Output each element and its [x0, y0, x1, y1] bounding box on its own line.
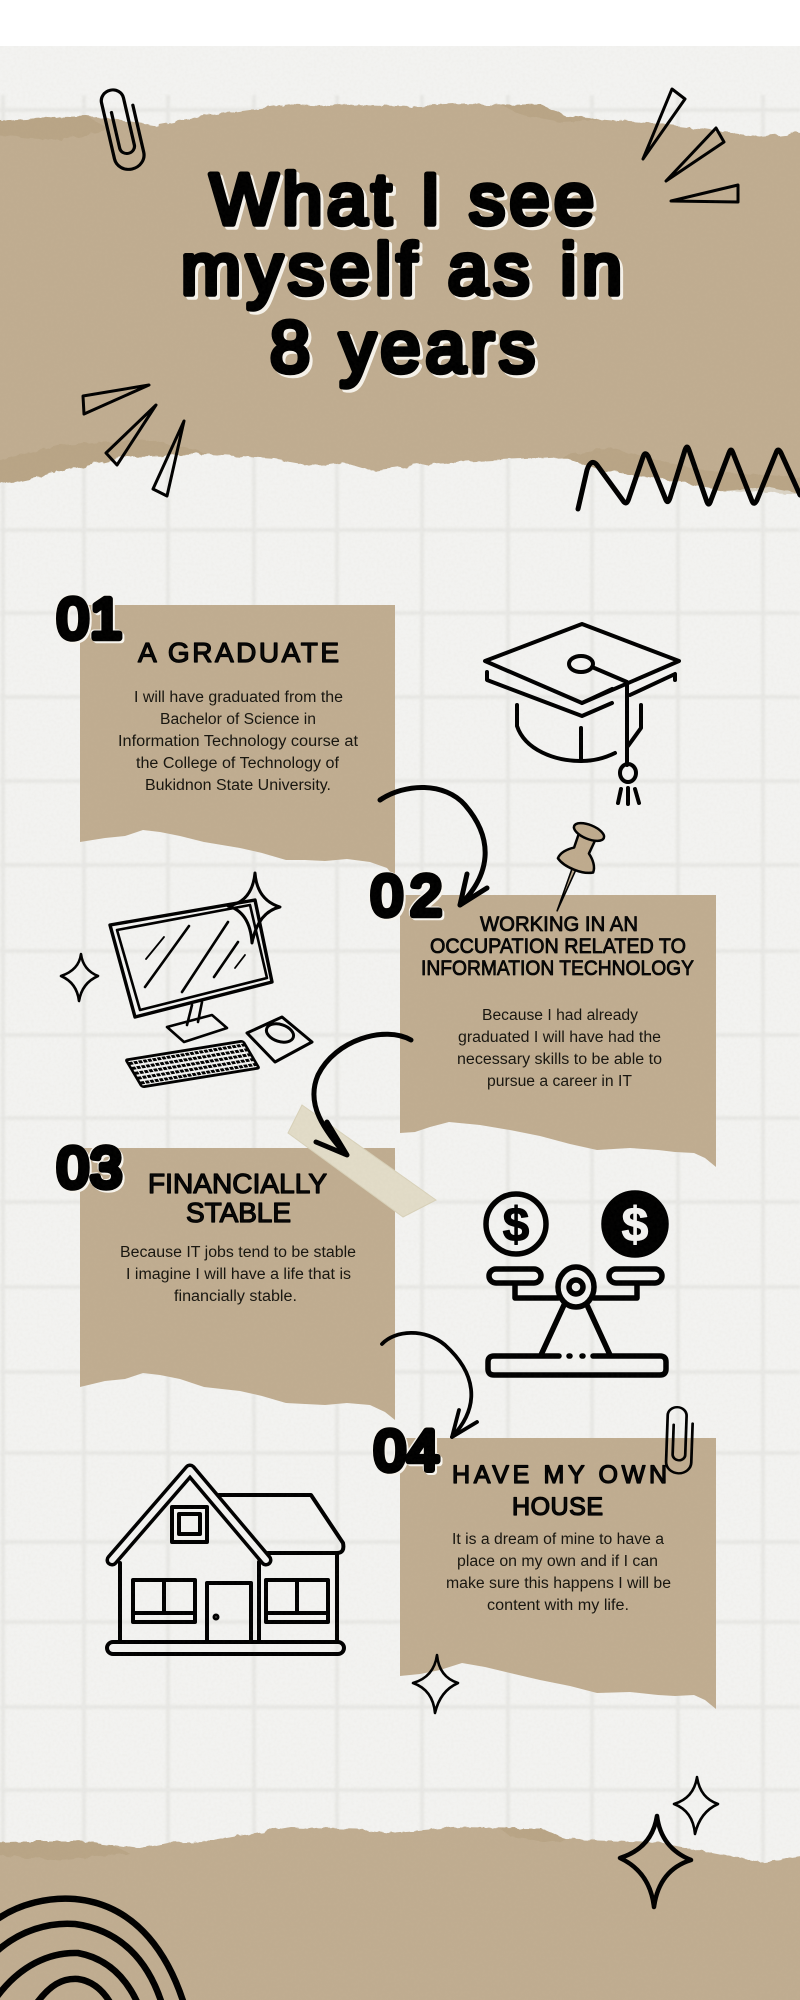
icon: house — [107, 1470, 344, 1654]
heading: financially stable: STABLE — [186, 1197, 291, 1228]
panel: step 4 — [374, 1419, 716, 1709]
icon: concentric arcs — [0, 1899, 184, 2000]
card 1 paper — [80, 605, 395, 878]
keyboard — [126, 1041, 259, 1087]
stand — [167, 1002, 227, 1042]
gable roof — [112, 1470, 266, 1560]
title: What I see — [210, 160, 594, 240]
icon: masking tape — [288, 1105, 436, 1217]
coin filled: $ — [622, 1199, 649, 1252]
heading: working in an occupation — [421, 913, 694, 980]
number 02: 02 — [371, 864, 442, 928]
body text — [446, 1531, 671, 1614]
icon: graduation cap — [485, 624, 679, 804]
body text: financially stable. — [174, 1288, 297, 1305]
side roof — [219, 1495, 343, 1553]
header torn paper band — [0, 104, 800, 495]
number 03: 03 — [57, 1136, 122, 1200]
title — [181, 160, 622, 388]
heading: have my own house: HAVE MY OWN — [452, 1461, 667, 1489]
panel: step 3 — [57, 1136, 395, 1420]
body text: Bachelor of Science in — [160, 711, 316, 728]
scale beam and pans — [489, 1267, 662, 1307]
icon: burst top right — [643, 89, 738, 202]
body text: It is a dream of mine to have a — [452, 1531, 664, 1548]
heading: working in an occupation: INFORMATION TECHNOLOGY — [421, 957, 694, 980]
heading: have my own house: HOUSE — [512, 1493, 603, 1521]
arrow: step 3 to step 4 — [382, 1333, 477, 1437]
body text: necessary skills to be able to — [457, 1051, 662, 1068]
body text: graduated I will have had the — [458, 1029, 661, 1046]
body text: Information Technology course at — [118, 733, 359, 750]
heading: working in an occupation: OCCUPATION RELATED TO — [430, 935, 686, 958]
base — [107, 1642, 344, 1654]
body text: Because I had already — [482, 1007, 638, 1024]
body text: pursue a career in IT — [487, 1073, 633, 1090]
icon: zigzag scribble — [578, 447, 800, 509]
body text: place on my own and if I can — [457, 1553, 658, 1570]
body text — [118, 689, 359, 794]
icon: sparkle on monitor — [228, 873, 280, 943]
attic window — [172, 1507, 207, 1542]
scale stand — [488, 1305, 666, 1375]
heading: financially stable: FINANCIALLY — [148, 1168, 327, 1199]
panel: step 2 — [371, 864, 716, 1167]
footer torn paper band — [0, 1827, 800, 2000]
body text — [457, 1007, 662, 1090]
arrow: step 1 to step 2 — [380, 787, 487, 905]
coin outline — [486, 1194, 546, 1254]
heading: working in an occupation: WORKING IN AN — [480, 913, 638, 936]
walls — [120, 1553, 337, 1642]
body text: Because IT jobs tend to be stable — [120, 1244, 356, 1261]
title: 8 years — [270, 308, 535, 388]
icon: balance scale with coins — [486, 1193, 666, 1375]
body text: the College of Technology of — [136, 755, 340, 772]
number 01: 01 — [57, 587, 122, 651]
heading: financially stable — [148, 1168, 327, 1228]
number 04: 04 — [374, 1419, 439, 1483]
panel: step 1 — [57, 587, 395, 878]
icon: burst lower left — [83, 385, 184, 496]
coin outline: $ — [503, 1199, 530, 1252]
heading: have my own house — [452, 1461, 667, 1521]
icon: sparkle under step 4 — [413, 1655, 458, 1713]
coin filled — [604, 1193, 666, 1255]
body text: content with my life. — [487, 1597, 629, 1614]
body text: Bukidnon State University. — [145, 777, 331, 794]
mouse and pad — [247, 1017, 312, 1062]
card 4 paper — [400, 1438, 716, 1709]
icon: sparkle right large — [620, 1816, 691, 1907]
icon: push pin — [540, 818, 609, 918]
card 2 paper — [400, 895, 716, 1167]
body text: I imagine I will have a life that is — [126, 1266, 351, 1283]
heading: a graduate: A GRADUATE — [138, 637, 339, 668]
card 3 paper — [80, 1148, 395, 1420]
body text: make sure this happens I will be — [446, 1575, 671, 1592]
icon: paperclip on step 4 — [666, 1407, 693, 1474]
body text: I will have graduated from the — [134, 689, 343, 706]
body text — [120, 1244, 356, 1305]
windows — [133, 1580, 328, 1622]
icon: sparkle right small — [674, 1777, 718, 1834]
icon: paperclip top left — [99, 86, 147, 172]
icon: desktop computer — [110, 900, 312, 1087]
icon: small sparkle left — [61, 954, 98, 1001]
monitor — [110, 900, 272, 1017]
title: myself as in — [181, 230, 622, 310]
door — [207, 1583, 251, 1642]
arrow: step 2 to step 3 — [314, 1034, 411, 1155]
